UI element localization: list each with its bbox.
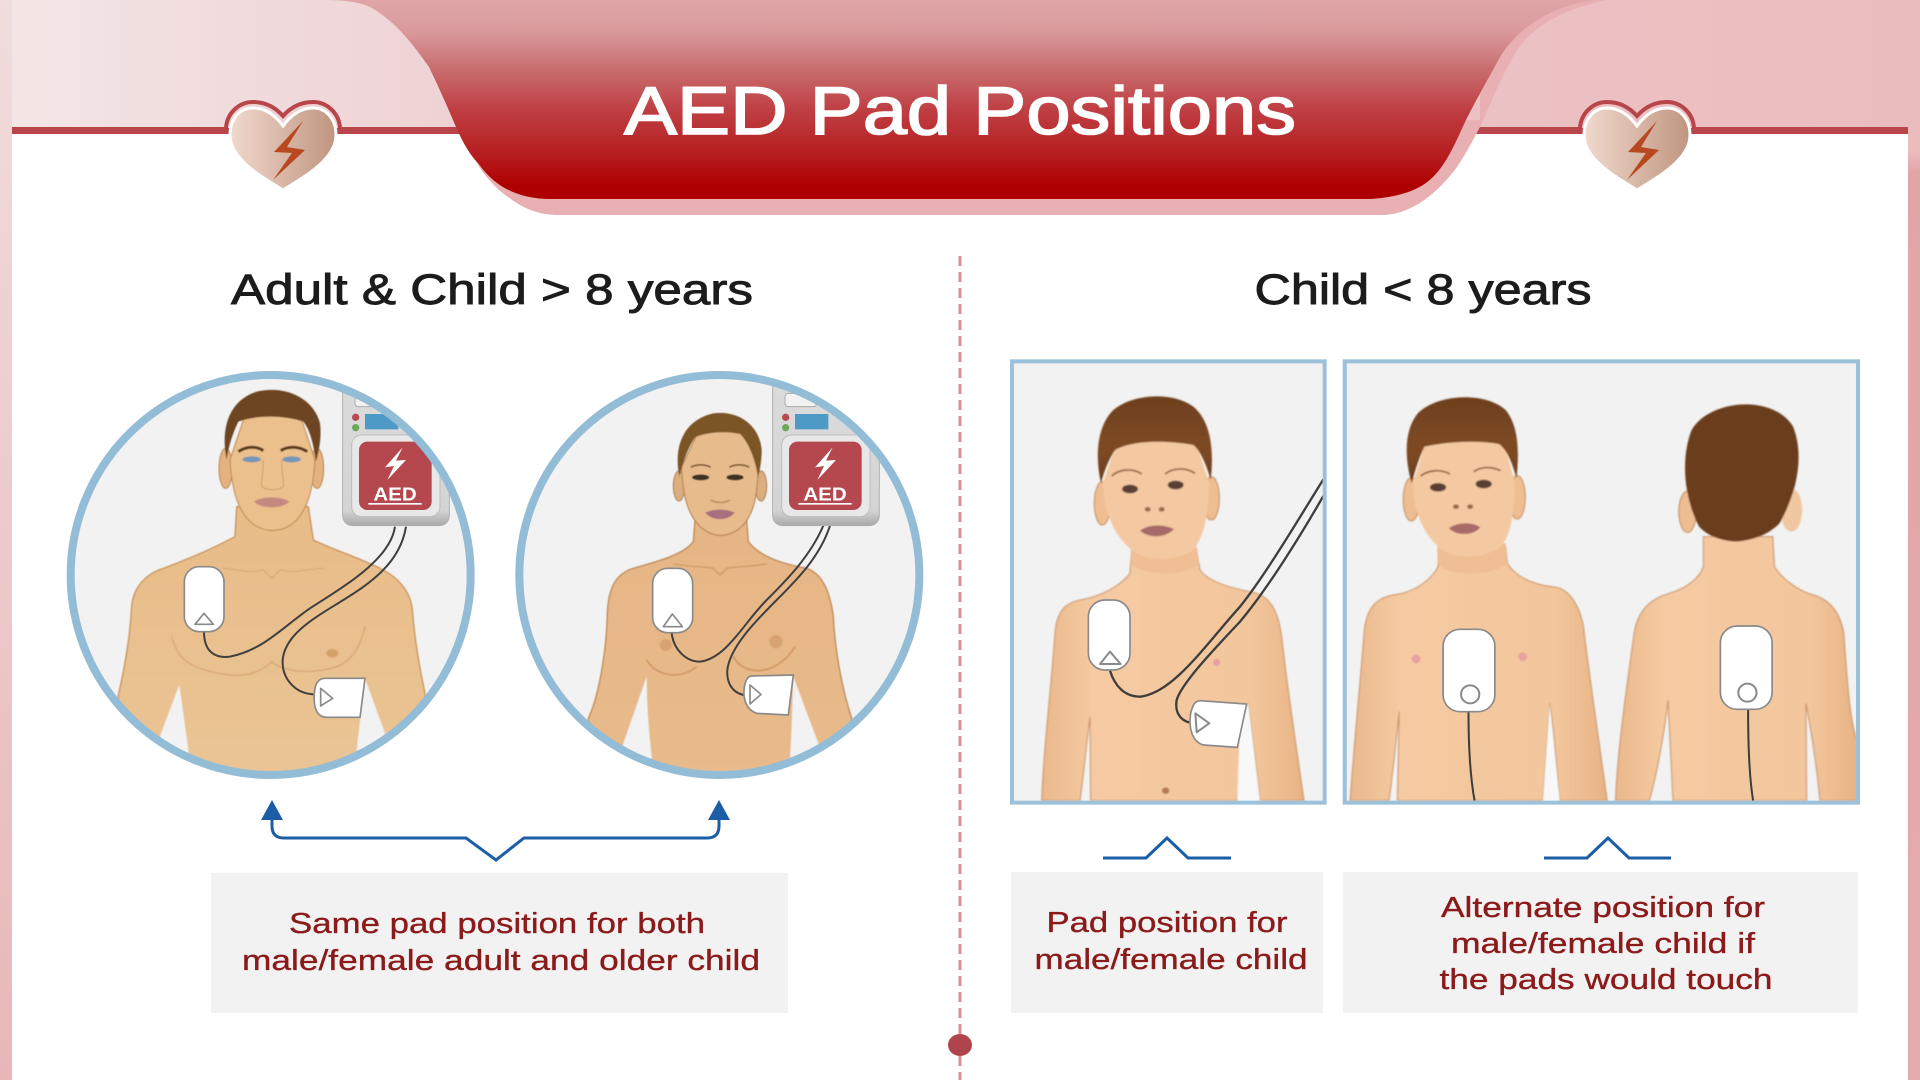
caption: alternate child pad position: the pads would touch	[1440, 964, 1772, 996]
panel: adult male pad position	[71, 373, 471, 793]
title: AED Pad Positions	[624, 73, 1296, 149]
header tab shadow	[470, 0, 1607, 215]
upper pad	[1088, 600, 1130, 670]
heading: child under 8: Child < 8 years	[1254, 266, 1592, 314]
caption: alternate child pad position	[1343, 872, 1858, 1013]
divider with end dot	[948, 256, 972, 1080]
arrow: caret to child pad panel	[1103, 838, 1231, 858]
panel: child anterior-posterior pad position	[1345, 361, 1858, 803]
panel: adult female pad position	[519, 373, 919, 793]
panel: child anterior-lateral pad position	[1012, 361, 1325, 803]
caption: alternate child pad position: Alternate position for	[1441, 892, 1765, 924]
AED device: AED	[373, 483, 417, 504]
upper pad	[653, 568, 693, 633]
arrow: caret to alternate child pad panel	[1544, 838, 1671, 858]
AED device	[773, 373, 879, 526]
caption: alternate child pad position: male/female child if	[1451, 928, 1756, 960]
header tab	[325, 0, 1595, 199]
caption: child pad position	[1011, 872, 1323, 1013]
caption: adult pad position: Same pad position for both	[289, 908, 705, 940]
cables	[672, 526, 830, 695]
icon: right heart with lightning bolt	[1580, 102, 1694, 190]
heading: adult and child over 8: Adult & Child > 8 years	[231, 266, 753, 314]
header rule	[12, 127, 1908, 134]
arrow: bracket pointing to both adult circles	[261, 800, 730, 860]
caption: child pad position: Pad position for	[1046, 907, 1288, 939]
cables	[204, 527, 406, 694]
AED device	[342, 392, 450, 526]
lower pad	[314, 678, 365, 717]
front view boy	[1350, 397, 1607, 801]
caption: adult pad position: male/female adult and older child	[242, 945, 760, 977]
caption: adult pad position	[211, 873, 788, 1013]
AED device: AED	[803, 483, 847, 504]
lower pad	[1190, 701, 1247, 747]
back view boy	[1616, 404, 1857, 801]
icon: left heart with lightning bolt	[226, 102, 340, 190]
caption: child pad position: male/female child	[1034, 944, 1308, 976]
upper pad	[184, 567, 224, 632]
lower pad	[744, 675, 793, 715]
cables	[1110, 479, 1323, 723]
